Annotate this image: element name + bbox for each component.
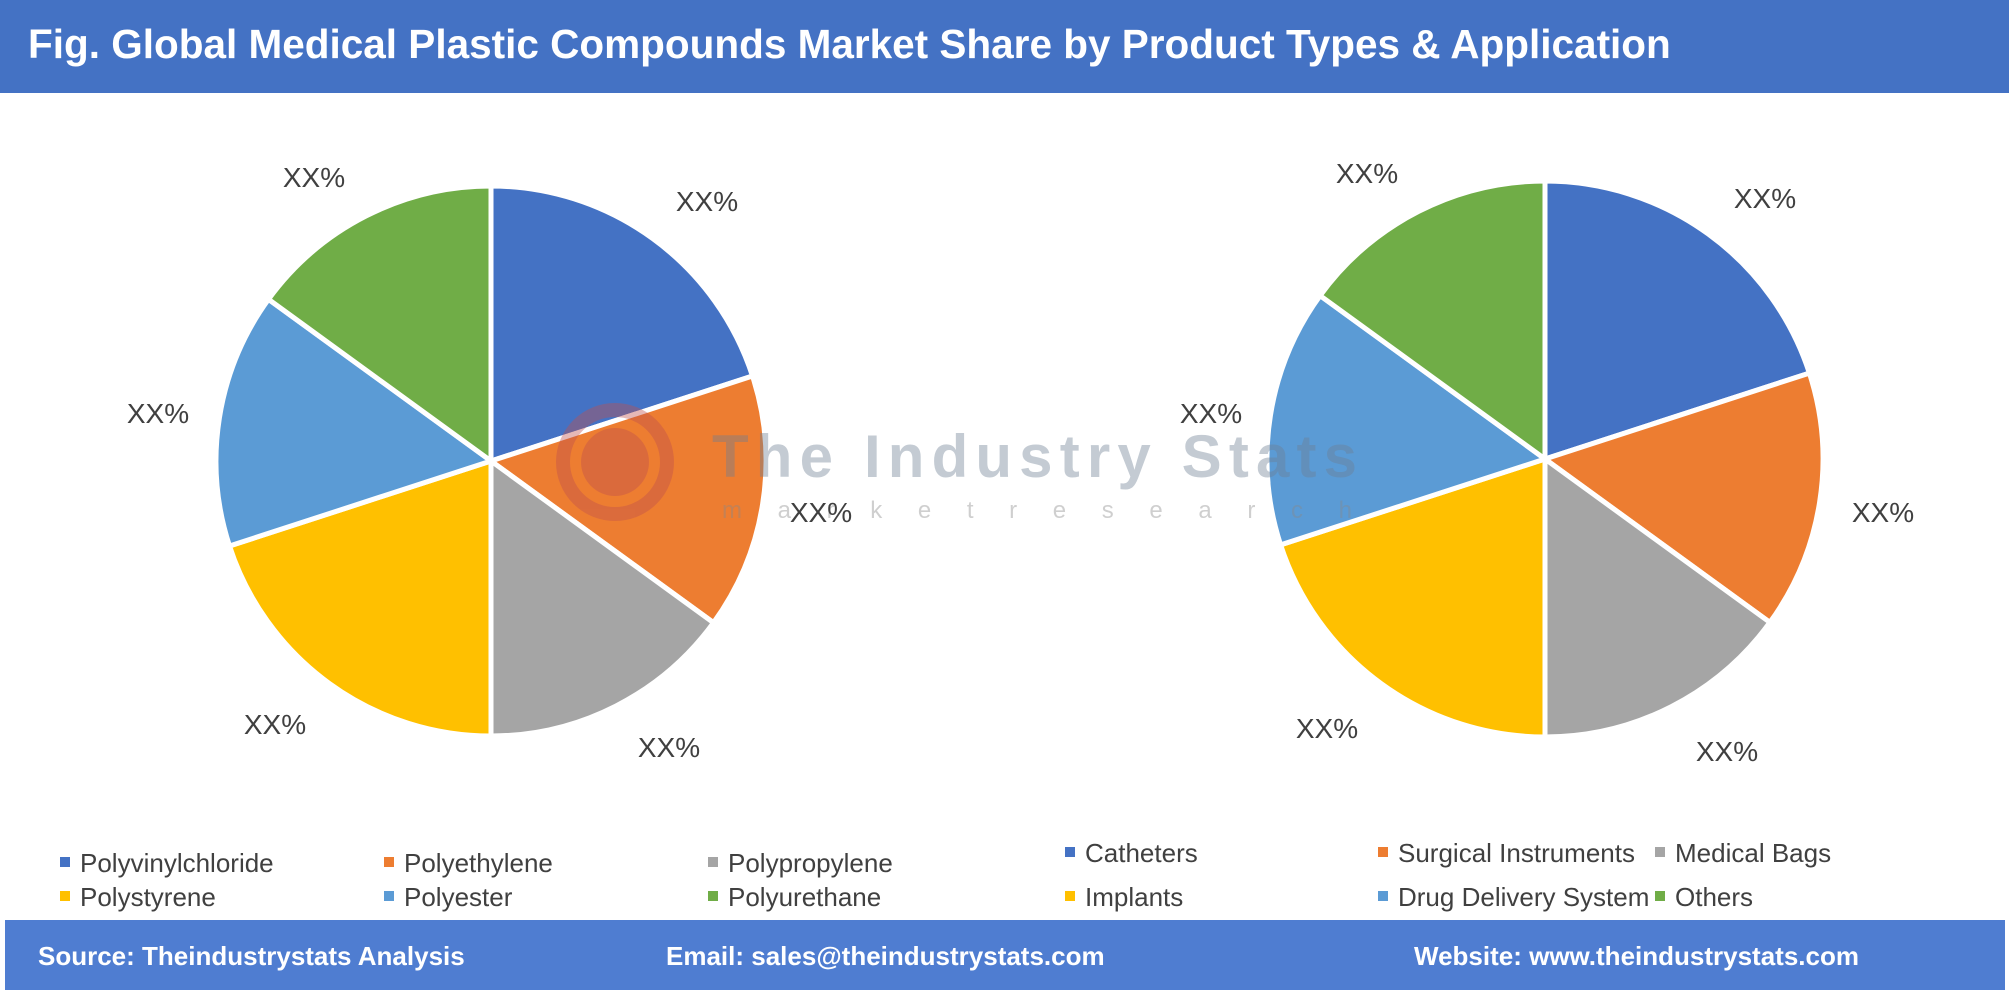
watermark: m a r k e t r e s e a r c h	[722, 497, 1352, 524]
percentage labels: XX%	[244, 709, 306, 740]
pie: product types	[216, 186, 766, 736]
percentage labels: XX%	[1180, 398, 1242, 429]
percentage labels: XX%	[127, 398, 189, 429]
legend: product types: Polyester	[404, 882, 512, 912]
pie: application	[1267, 181, 1823, 737]
percentage labels: XX%	[1336, 158, 1398, 189]
footer: email: Email: sales@theindustrystats.com	[666, 941, 1105, 971]
watermark: The Industry Stats	[712, 423, 1357, 490]
legend: product types	[60, 848, 893, 912]
legend: product types: Polypropylene	[728, 848, 893, 878]
footer: website: Website: www.theindustrystats.com	[1414, 941, 1859, 971]
footer bar	[5, 920, 2005, 990]
watermark	[563, 410, 1357, 524]
legend: product types: Polyurethane	[728, 882, 881, 912]
legend: application: Surgical Instruments	[1398, 838, 1635, 868]
percentage labels	[127, 158, 1914, 767]
legend: application: Others	[1675, 882, 1753, 912]
title: Fig. Global Medical Plastic Compounds Market Share by Product Types & Application	[28, 21, 1671, 67]
legend: application: Implants	[1085, 882, 1183, 912]
percentage labels: XX%	[790, 497, 852, 528]
legend: product types: Polyvinylchloride	[80, 848, 274, 878]
percentage labels: XX%	[638, 732, 700, 763]
legend: product types: Polystyrene	[80, 882, 216, 912]
percentage labels: XX%	[1734, 183, 1796, 214]
legend: application: Drug Delivery System	[1398, 882, 1649, 912]
legend: application: Catheters	[1085, 838, 1198, 868]
percentage labels: XX%	[1296, 713, 1358, 744]
footer: source: Source: Theindustrystats Analysis	[38, 941, 465, 971]
legend: application	[1065, 838, 1831, 912]
percentage labels: XX%	[676, 186, 738, 217]
percentage labels: XX%	[1852, 497, 1914, 528]
legend: application: Medical Bags	[1675, 838, 1831, 868]
legend: product types: Polyethylene	[404, 848, 553, 878]
title bar	[0, 0, 2009, 93]
percentage labels: XX%	[1696, 736, 1758, 767]
percentage labels: XX%	[283, 162, 345, 193]
